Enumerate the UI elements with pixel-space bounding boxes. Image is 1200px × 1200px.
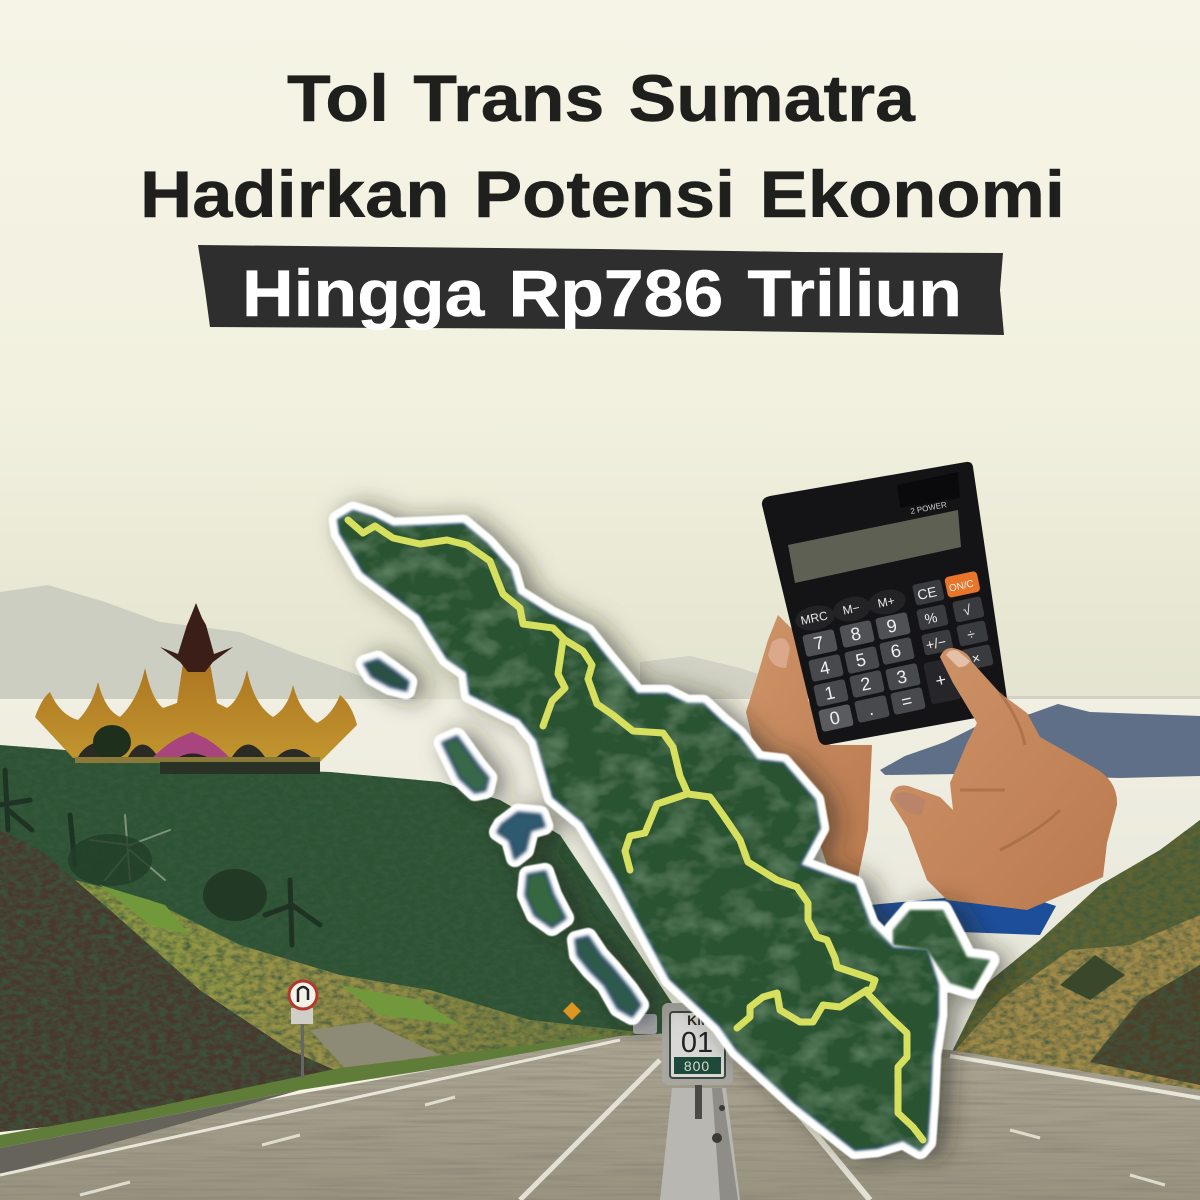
Sumatra land (338, 511, 938, 1150)
icon: Lampung crown building (35, 603, 357, 774)
function keys: ON/C (948, 579, 975, 595)
thumbnail (895, 792, 925, 815)
roadside grass strip (0, 1036, 620, 1148)
magenta flowers (150, 732, 233, 762)
Bengkulu branch (737, 990, 867, 1028)
left green hill (0, 745, 680, 1040)
hand shape (746, 615, 872, 878)
median barrier (660, 1085, 740, 1200)
kilometre sign (662, 1003, 733, 1085)
sea (0, 699, 1200, 1079)
thumbnail (768, 638, 790, 668)
tree (93, 725, 131, 759)
fingernail (946, 650, 970, 667)
function keys (912, 571, 994, 705)
kilometre sign: 800 (684, 1058, 710, 1074)
model label: 2 POWER (910, 500, 948, 516)
kilometre sign: 01 (681, 1027, 713, 1059)
Aceh branch (543, 640, 565, 726)
tape highlight (198, 245, 1004, 335)
building body (35, 640, 357, 762)
number keys: . (866, 699, 875, 719)
Padang branch (625, 794, 687, 870)
knuckle shading (960, 693, 1060, 850)
title line 1: Tol Trans Sumatra (287, 61, 916, 135)
hand shape (890, 648, 1117, 910)
palm trees (0, 770, 320, 945)
kilometre sign: KM (687, 1012, 709, 1028)
calculator body (762, 462, 1009, 745)
number keys: 4 (818, 657, 832, 679)
number keys: 2 (859, 673, 873, 695)
memory keys: M− (841, 600, 861, 618)
number keys: 9 (885, 615, 899, 637)
memory keys: M+ (876, 593, 896, 611)
number keys: 5 (854, 649, 868, 671)
function keys: + (934, 669, 948, 691)
number keys: = (900, 690, 914, 712)
island in the sea (880, 704, 1200, 778)
function keys: ÷ (966, 625, 977, 643)
toll road network (348, 520, 923, 1140)
number keys (802, 612, 926, 732)
function keys: % (923, 609, 939, 627)
Nias island (443, 737, 488, 792)
icon: left hand holding calculator (746, 615, 872, 878)
brown front hill (0, 830, 335, 1132)
grassy slope (75, 880, 640, 1070)
function keys: CE (916, 583, 938, 603)
memory keys (793, 586, 908, 634)
right hillside (950, 820, 1200, 1095)
solar panel (897, 472, 960, 508)
blue sleeve and roof (870, 892, 1056, 935)
number keys: 0 (828, 707, 842, 729)
Sipora and Pagai islands (576, 937, 640, 1016)
function keys: +/− (924, 633, 948, 653)
display (788, 510, 961, 583)
number keys: 6 (889, 640, 903, 662)
map of Sumatra (338, 511, 990, 1150)
arches (78, 743, 312, 758)
base ledge (75, 757, 320, 763)
highlighted line: Hingga Rp786 Triliun (242, 256, 962, 330)
map outline and shadow (338, 511, 990, 1150)
number keys: 7 (812, 632, 826, 654)
tower top (160, 603, 233, 672)
main toll line (348, 520, 923, 1140)
Bangka island (893, 910, 990, 990)
number keys: 3 (895, 666, 909, 688)
memory keys: MRC (799, 608, 829, 628)
title line 2: Hadirkan Potensi Ekonomi (140, 157, 1065, 231)
function keys: √ (962, 601, 973, 619)
Batu islands (498, 813, 544, 858)
number keys: 8 (849, 623, 863, 645)
distant car (633, 1014, 657, 1034)
distant mountains (0, 585, 1200, 702)
road sign: yellow warning (563, 1002, 581, 1020)
road (0, 1032, 1200, 1200)
Simeulue island (365, 660, 408, 690)
icon: right hand pressing calculator (890, 648, 1117, 910)
title (140, 61, 1065, 335)
road sign: no U-turn (289, 981, 317, 1078)
background sky (0, 0, 1200, 720)
calculator (762, 462, 1009, 745)
function keys: × (970, 649, 982, 667)
number keys: 1 (823, 682, 837, 704)
Siberut island (526, 872, 565, 927)
